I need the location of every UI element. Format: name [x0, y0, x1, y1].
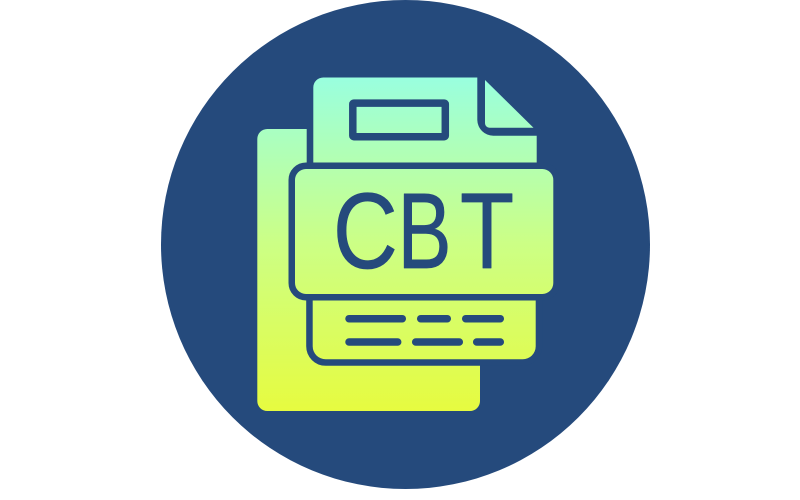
CBT label band — [295, 169, 553, 294]
background circle — [161, 0, 650, 489]
front document upper page — [313, 78, 537, 163]
folded corner — [485, 80, 534, 128]
back document page — [257, 129, 480, 411]
CBT text: B — [398, 172, 452, 292]
front document lower page — [313, 275, 536, 359]
label rectangle — [353, 103, 445, 137]
CBT text — [333, 171, 514, 292]
text lines — [349, 319, 500, 342]
CBT text: C — [333, 171, 398, 292]
CBT text: T — [460, 171, 514, 291]
